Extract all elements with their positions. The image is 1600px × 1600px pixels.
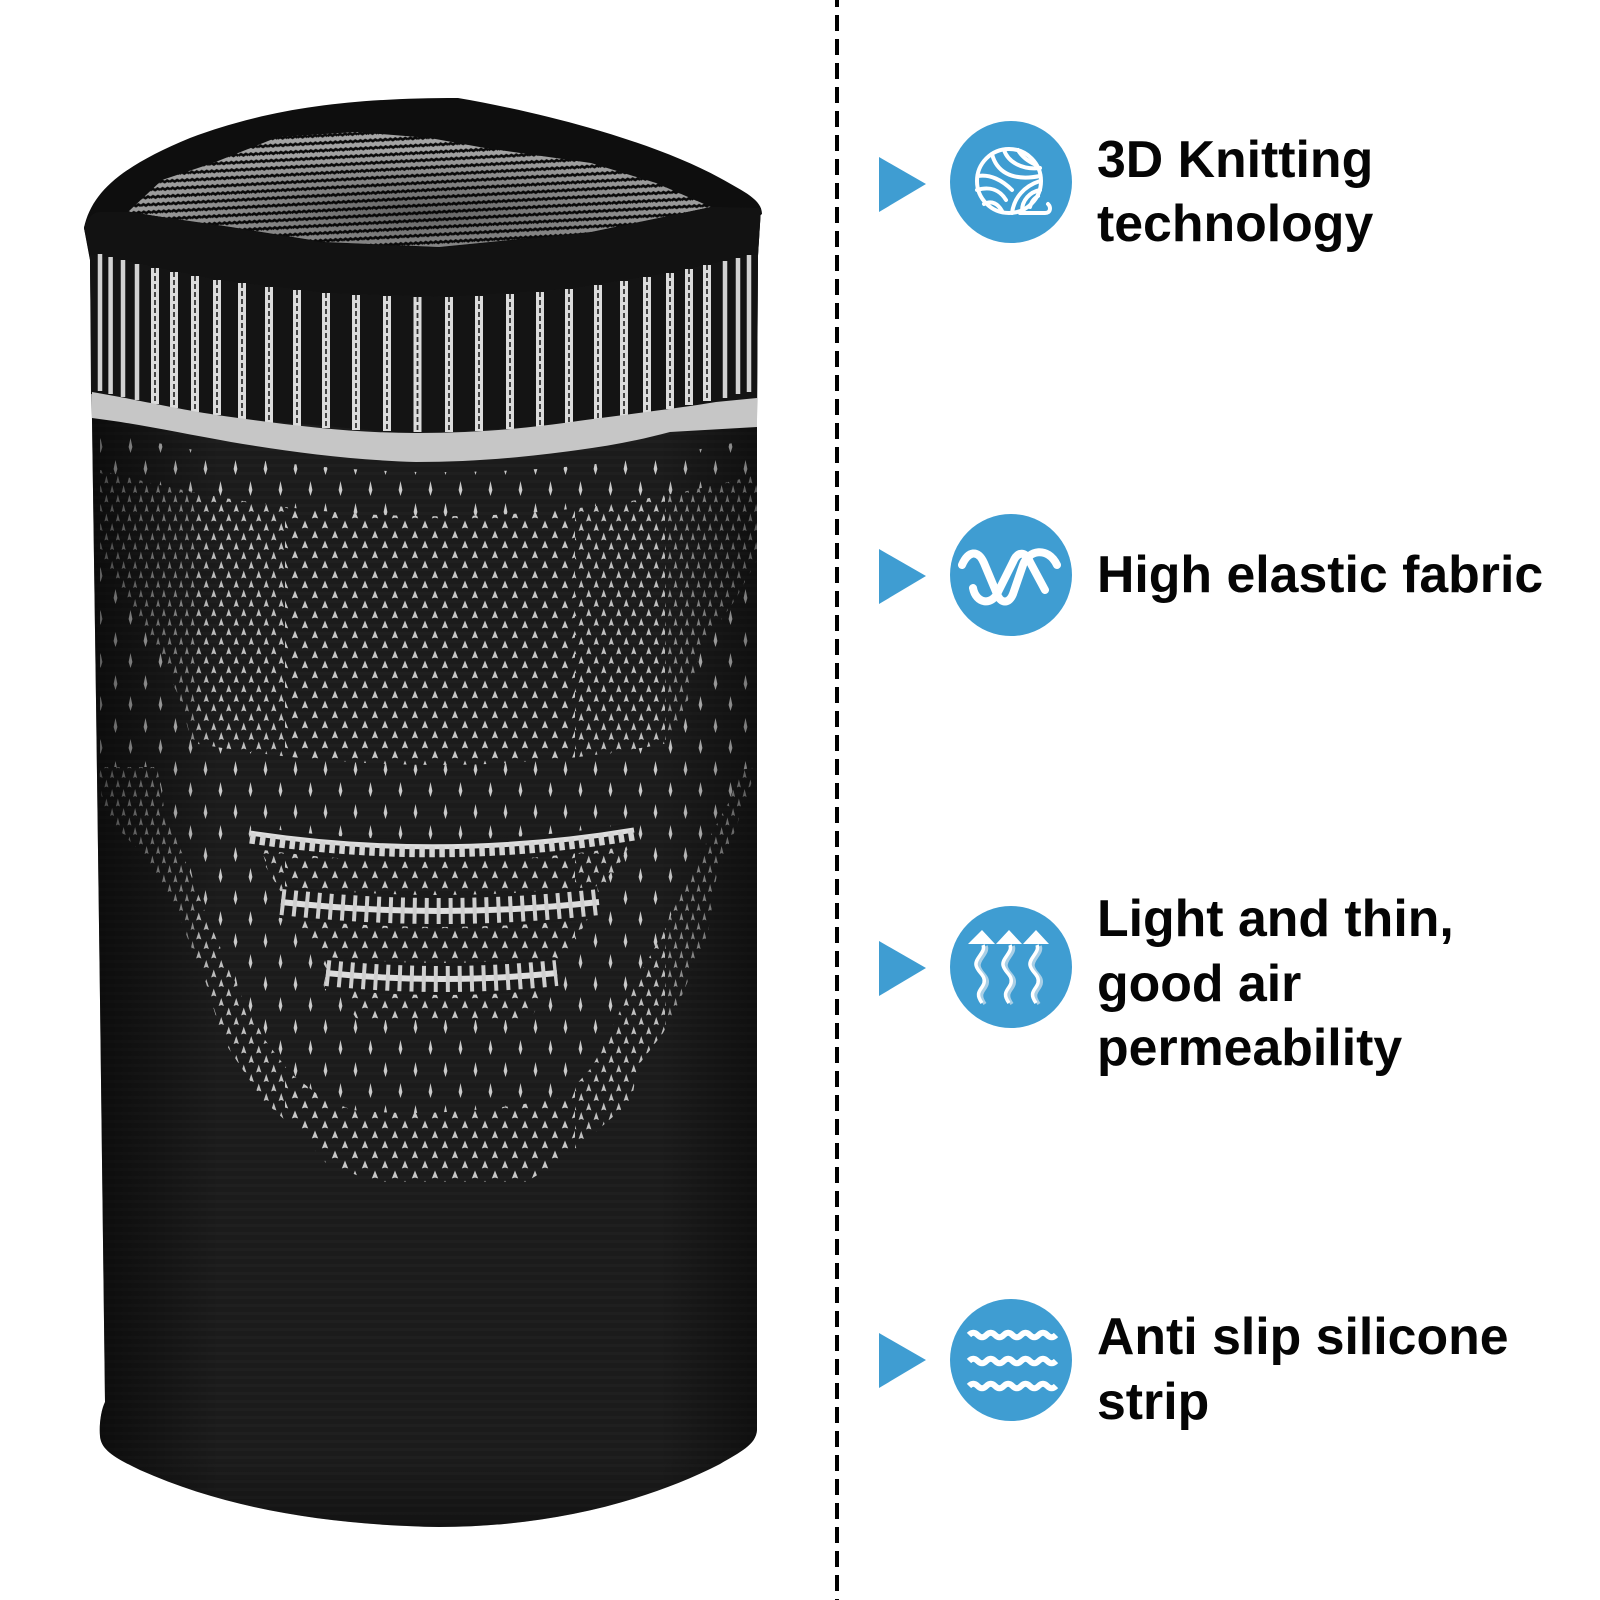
- panel: knee sleeve product: [84, 98, 762, 1527]
- feature label: 3D Knitting: [1097, 130, 1373, 188]
- divider: dashed vertical line: [835, 0, 839, 1600]
- feature row: 3D knitting: [879, 121, 1373, 252]
- icon: elastic waves: [950, 514, 1072, 636]
- feature row: anti slip silicone strip: [879, 1299, 1509, 1430]
- feature label: permeability: [1097, 1018, 1402, 1076]
- body side shading: [84, 207, 761, 1527]
- lower cuff shade: [100, 1180, 757, 1527]
- feature row: light and thin: [879, 889, 1454, 1076]
- knit rib texture: [84, 207, 761, 1527]
- patella line three: [326, 973, 557, 979]
- front rim band: [84, 207, 761, 297]
- sleeve inner knit lining: [128, 132, 711, 247]
- sleeve body: [84, 207, 761, 1527]
- ribbed top section background: [90, 254, 758, 434]
- light grey horizontal band: [92, 392, 757, 462]
- side and lower tick region: [100, 560, 757, 1113]
- ticks under band: [100, 430, 757, 516]
- feature label: High elastic fabric: [1097, 545, 1543, 603]
- feature label: Light and thin,: [1097, 889, 1454, 947]
- icon: breathable arrows: [950, 906, 1072, 1028]
- feature label: strip: [1097, 1372, 1209, 1430]
- feature row: high elastic fabric: [879, 514, 1543, 636]
- patella line two: [281, 902, 599, 911]
- arrow marker: [879, 1333, 926, 1388]
- icon: silicone waves: [950, 1299, 1072, 1421]
- icon: yarn ball: [950, 121, 1072, 243]
- feature label: technology: [1097, 194, 1373, 252]
- arrow marker: [879, 157, 926, 212]
- arrow marker: [879, 941, 926, 996]
- patella line one: [250, 830, 634, 852]
- feature label: Anti slip silicone: [1097, 1307, 1509, 1365]
- knit vertical stripes: [100, 254, 749, 432]
- sleeve back rim: [84, 98, 762, 262]
- arrow marker: [879, 549, 926, 604]
- feature label: good air: [1097, 954, 1301, 1012]
- fine dot regions: dome, ring and patella trapezoid: [99, 470, 757, 1182]
